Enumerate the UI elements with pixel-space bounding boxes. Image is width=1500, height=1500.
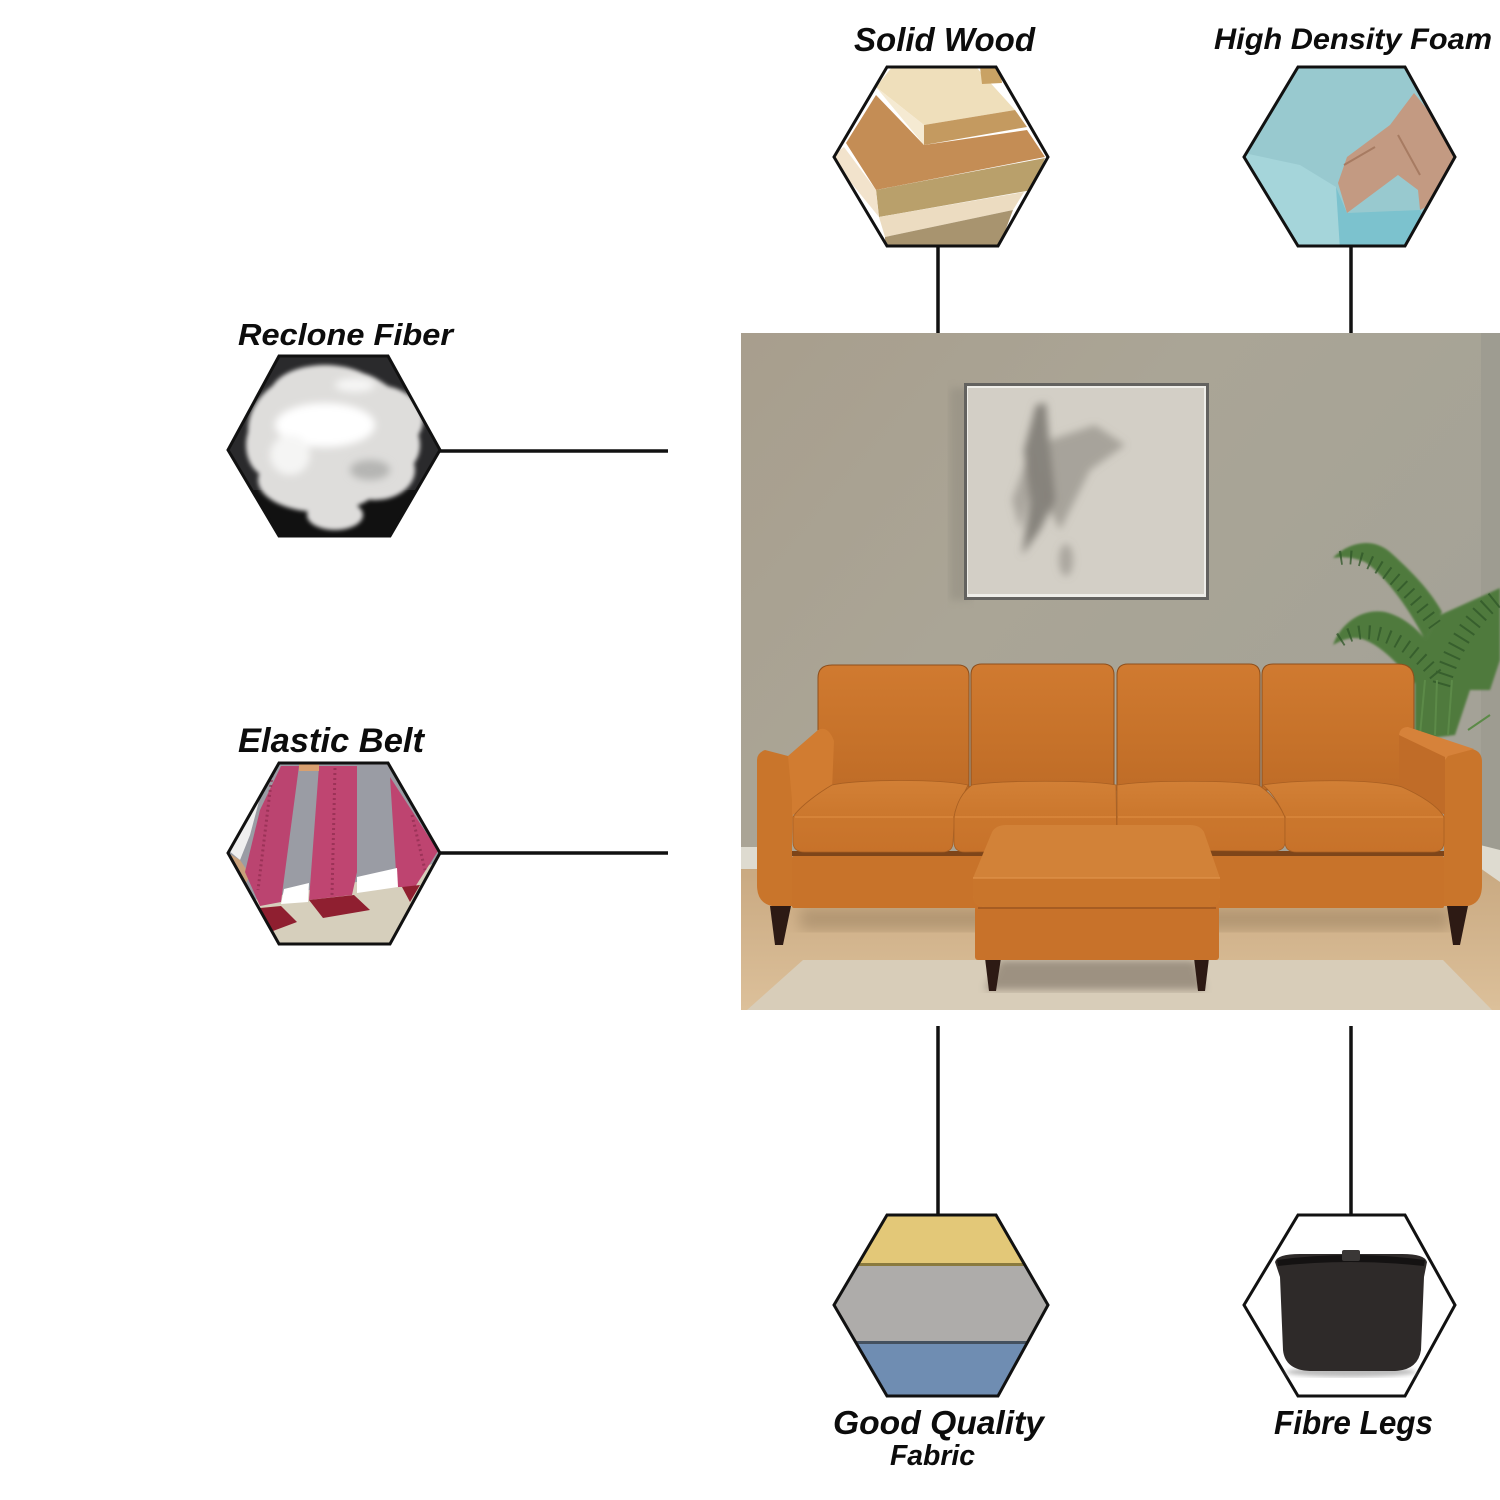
floor — [741, 868, 1500, 1010]
fronds texture — [1340, 557, 1495, 690]
ottoman — [973, 825, 1220, 991]
wall artwork — [950, 383, 1209, 600]
label: Good Quality Fabric: Fabric — [890, 1440, 975, 1472]
label: Fibre Legs: Fibre Legs — [1274, 1404, 1433, 1441]
hand — [1338, 93, 1460, 213]
ottoman base — [975, 906, 1219, 960]
label: High Density Foam: High Density Foam — [1214, 23, 1492, 56]
rug — [747, 960, 1492, 1010]
back cushions — [818, 664, 1414, 790]
seat piping — [795, 816, 1443, 818]
left arm — [757, 729, 834, 906]
hexagon: elastic belt — [225, 760, 445, 950]
sofa legs — [770, 906, 791, 945]
hexagon: solid wood — [830, 60, 1055, 250]
floor shadow — [800, 908, 1450, 930]
sofa — [757, 664, 1482, 945]
base rail — [792, 856, 1444, 908]
label: Reclone Fiber: Reclone Fiber — [238, 317, 455, 352]
wall corner — [1481, 333, 1500, 450]
seat cushions — [793, 780, 1444, 852]
hexagon: reclone fiber — [225, 350, 445, 540]
wall — [741, 333, 1500, 873]
baseboard — [741, 845, 1500, 882]
ottoman cushion — [974, 825, 1220, 878]
label: Elastic Belt: Elastic Belt — [238, 722, 426, 760]
plant — [1333, 543, 1500, 740]
right arm — [1399, 727, 1482, 906]
label: Good Quality Fabric — [833, 1404, 1046, 1472]
label: Solid Wood: Solid Wood — [854, 21, 1036, 58]
panel: room photo with orange sofa — [741, 333, 1500, 1010]
ottoman legs — [985, 958, 1001, 991]
connector lines — [440, 246, 1351, 1215]
hexagon: good quality fabric — [830, 1210, 1055, 1399]
label: Good Quality Fabric: Good Quality — [833, 1404, 1046, 1441]
hexagon: fibre legs — [1244, 1215, 1455, 1396]
hexagon: high density foam — [1240, 60, 1460, 250]
